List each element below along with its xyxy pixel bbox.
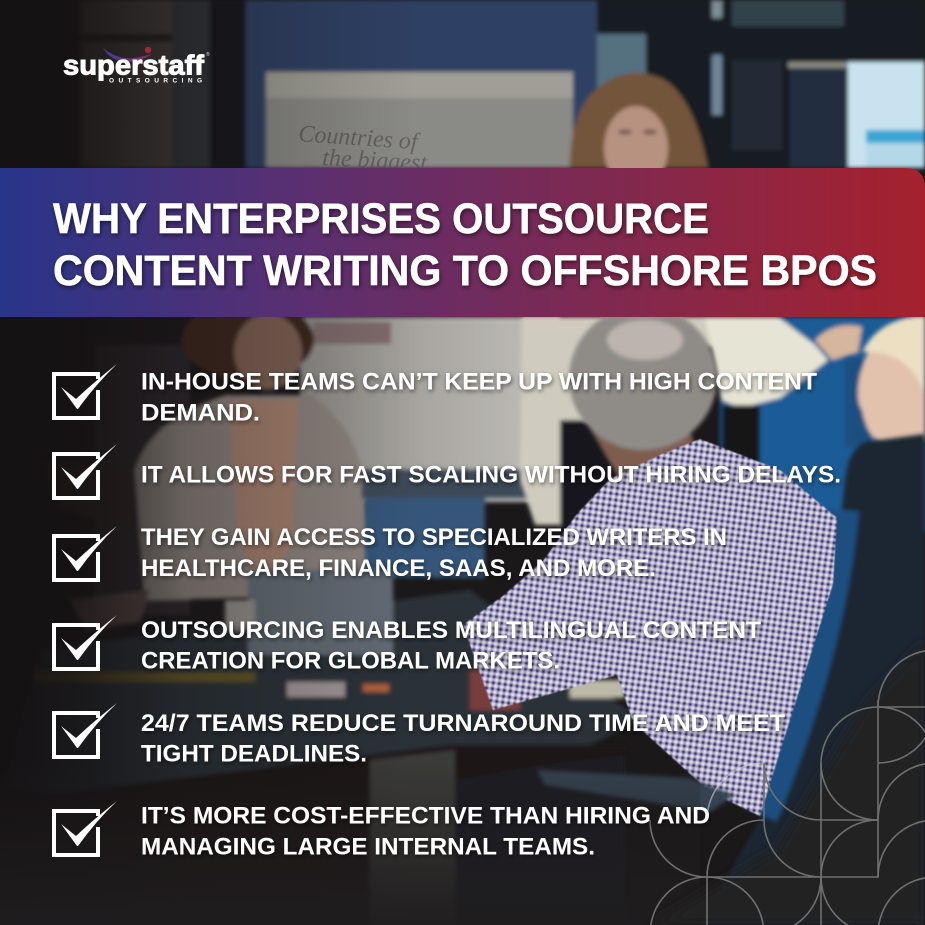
item 1 text: IN-HOUSE TEAMS CAN’T KEEP UP WITH HIGH CONTENT: [141, 368, 817, 396]
icon: checkbox: [54, 364, 117, 418]
item 3 text: [141, 524, 727, 582]
logo swoosh: [103, 48, 152, 62]
item 5: [54, 703, 785, 768]
item 3 text: HEALTHCARE, FINANCE, SAAS, AND MORE.: [141, 555, 656, 582]
photo: seated man's gingham shirt: [463, 439, 837, 816]
icon: checkbox: [54, 444, 117, 498]
banner gradient panel: [0, 168, 925, 317]
item 6 text: MANAGING LARGE INTERNAL TEAMS.: [141, 834, 595, 860]
item 5 text: [141, 710, 785, 768]
logo wordmark: superstaff: [63, 50, 205, 80]
item 1: [54, 364, 817, 426]
photo: background right blue wall and presenter arm: [520, 317, 925, 532]
banner heading: [53, 195, 877, 295]
photo: top wall and presenter: [80, 0, 925, 190]
photo: table with glasses and papers: [0, 470, 640, 925]
photo: chair arm rest: [537, 770, 735, 812]
title banner: [0, 168, 925, 317]
checklist: [54, 364, 841, 860]
photo: blonde woman: [845, 316, 925, 448]
photo: whiteboard handwriting: the biggest: [322, 145, 429, 177]
item 1 text: DEMAND.: [141, 400, 260, 426]
banner heading: CONTENT WRITING TO OFFSHORE BPOS: [53, 247, 877, 295]
item 5 text: 24/7 TEAMS REDUCE TURNAROUND TIME AND MEET: [141, 710, 785, 737]
item 4: [54, 615, 761, 674]
item 2 text: IT ALLOWS FOR FAST SCALING WITHOUT HIRING DELAYS.: [141, 462, 841, 488]
photo: whiteboard handwriting: [298, 121, 429, 177]
item 3: [54, 524, 727, 582]
icon: checkbox: [54, 615, 117, 669]
decorative geometric line pattern: [650, 650, 925, 925]
dark corner block behind pattern: [650, 640, 925, 925]
item 4 text: OUTSOURCING ENABLES MULTILINGUAL CONTENT: [141, 617, 761, 644]
item 2: [54, 444, 841, 498]
item 3 text: THEY GAIN ACCESS TO SPECIALIZED WRITERS IN: [141, 524, 727, 551]
registered mark: ®: [206, 51, 210, 58]
logo dot: [145, 47, 151, 53]
item 4 text: CREATION FOR GLOBAL MARKETS.: [141, 648, 560, 674]
logo: Superstaff Outsourcing: [63, 47, 210, 84]
icon: checkbox: [54, 703, 117, 757]
item 1 text: [141, 368, 817, 426]
icon: checkbox: [54, 526, 117, 580]
item 5 text: TIGHT DEADLINES.: [141, 740, 367, 768]
item 6 text: IT’S MORE COST-EFFECTIVE THAN HIRING AND: [141, 802, 710, 830]
photo: whiteboard handwriting: Countries of: [298, 121, 422, 156]
photo: seated man's head: [569, 306, 717, 480]
item 6 text: [141, 802, 710, 860]
banner heading: WHY ENTERPRISES OUTSOURCE: [53, 195, 709, 243]
icon: checkbox: [54, 801, 117, 855]
photo: right office chair: [700, 434, 925, 925]
photo: lower left seated woman and whiteboard: [40, 300, 560, 630]
item 4 text: [141, 617, 761, 674]
photo: lower fade: [0, 760, 700, 925]
logo tagline: OUTSOURCING: [109, 78, 202, 84]
item 6: [54, 801, 710, 860]
